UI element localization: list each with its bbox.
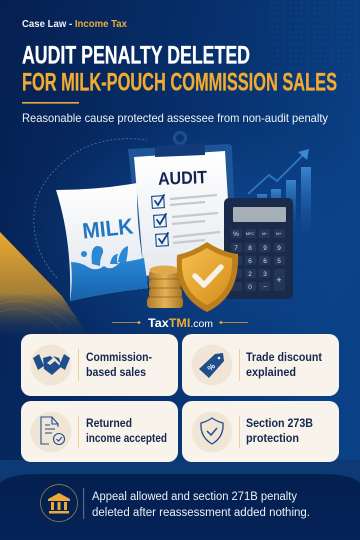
calculator: + [276, 275, 282, 285]
calculator: 3 [263, 271, 267, 278]
calculator: 8 [248, 245, 252, 252]
shield with check [177, 242, 238, 312]
footer text: deleted after reassessment added nothing. [92, 507, 310, 519]
audit heading: AUDIT [158, 167, 207, 189]
calculator: − [263, 284, 267, 291]
calculator: 9 [277, 245, 281, 252]
checklist [152, 195, 220, 246]
calculator [224, 198, 293, 299]
card text: Section 273B [246, 418, 313, 430]
icon: handshake [33, 354, 70, 375]
card text: Trade discount [246, 352, 322, 364]
clipboard with audit checklist [128, 132, 237, 282]
calculator: 7 [234, 245, 238, 252]
brand line: TaxTMI.com [148, 316, 213, 330]
calculator: 2 [248, 271, 252, 278]
icon: document with check [41, 417, 64, 444]
card: commission-based sales [21, 334, 178, 396]
card text: income accepted [86, 433, 167, 445]
card: section 273B [182, 401, 339, 462]
card text: based sales [86, 367, 146, 379]
calculator: MFC [246, 231, 254, 236]
title [22, 42, 337, 96]
card text: Returned [86, 418, 132, 430]
icon: discount tag [199, 353, 224, 378]
title: AUDIT PENALTY DELETED [22, 42, 250, 70]
subtitle: Reasonable cause protected assessee from non-audit penalty [22, 111, 328, 125]
milk label: MILK [81, 213, 135, 244]
calculator: 9 [263, 245, 267, 252]
calculator: 5 [277, 258, 281, 265]
card text: Commission- [86, 352, 152, 364]
calculator: 0 [248, 284, 252, 291]
footer panel [0, 474, 360, 540]
icon: shield outline [201, 418, 223, 444]
calculator: % [233, 231, 239, 238]
clip [155, 132, 205, 157]
card text: protection [246, 433, 299, 445]
card: trade discount [182, 334, 339, 396]
brand line [112, 316, 248, 330]
card: returned income [21, 401, 178, 462]
category label: Case Law - Income Tax [22, 18, 127, 30]
coin stack [147, 266, 183, 308]
calculator: M− [262, 231, 268, 236]
calculator: 6 [263, 258, 267, 265]
calculator: 6 [248, 258, 252, 265]
milk pouch [56, 183, 148, 301]
icon: discount tag: % [206, 362, 217, 373]
title underline [22, 102, 79, 104]
growth chart [248, 149, 311, 237]
footer text: Appeal allowed and section 271B penalty [92, 491, 297, 503]
dashed arc [34, 139, 147, 278]
gold corner shape [0, 232, 92, 342]
calculator: M+ [276, 231, 282, 236]
icon: courthouse [40, 484, 78, 522]
card text: explained [246, 367, 296, 379]
